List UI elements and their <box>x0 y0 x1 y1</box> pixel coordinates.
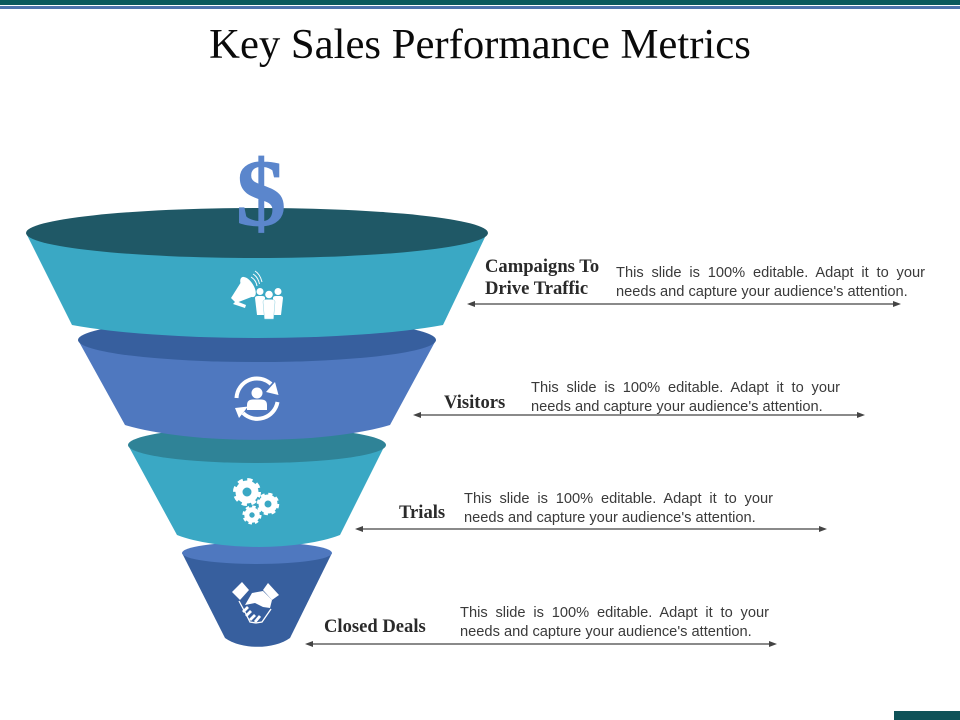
label: closed deals: Closed Deals <box>324 616 426 637</box>
text: trials description <box>464 491 773 526</box>
arrow: closed deals <box>305 641 777 647</box>
funnel tier 2: visitors <box>78 318 436 440</box>
label: campaigns to drive traffic: Campaigns To <box>485 256 599 277</box>
text: trials description: needs and capture your audience's attention. <box>464 510 756 526</box>
icon: person with cycle arrows <box>235 378 278 419</box>
text: closed deals description <box>460 605 769 640</box>
label: trials: Trials <box>399 502 445 523</box>
icon: dollar sign: $ <box>236 142 286 246</box>
text: closed deals description: needs and capture your audience's attention. <box>460 624 752 640</box>
text: visitors description: This slide is 100% editable. Adapt it to your <box>531 380 840 396</box>
icon: megaphone and people <box>231 271 283 319</box>
footer accent block <box>894 711 960 720</box>
icon: handshake <box>232 582 279 623</box>
text: campaigns description: This slide is 100% editable. Adapt it to your <box>616 265 925 281</box>
label: campaigns to drive traffic: Drive Traffic <box>485 278 588 299</box>
text: closed deals description: This slide is 100% editable. Adapt it to your <box>460 605 769 621</box>
top band <box>0 0 960 9</box>
title: Key Sales Performance Metrics <box>209 21 751 68</box>
label: visitors: Visitors <box>444 392 505 413</box>
text: visitors description: needs and capture your audience's attention. <box>531 398 823 414</box>
text: visitors description <box>531 380 840 414</box>
text: campaigns description: needs and capture your audience's attention. <box>616 284 908 300</box>
funnel tier 3: trials <box>128 427 386 547</box>
label: campaigns to drive traffic <box>485 256 599 299</box>
arrow: campaigns <box>467 301 901 307</box>
funnel tier 1: campaigns <box>26 208 488 338</box>
text: campaigns description <box>616 265 925 300</box>
arrow: visitors <box>413 412 865 418</box>
text: trials description: This slide is 100% editable. Adapt it to your <box>464 491 773 507</box>
icon: gears <box>234 480 278 523</box>
arrow: trials <box>355 526 827 532</box>
funnel tier 4: closed deals <box>182 542 332 647</box>
